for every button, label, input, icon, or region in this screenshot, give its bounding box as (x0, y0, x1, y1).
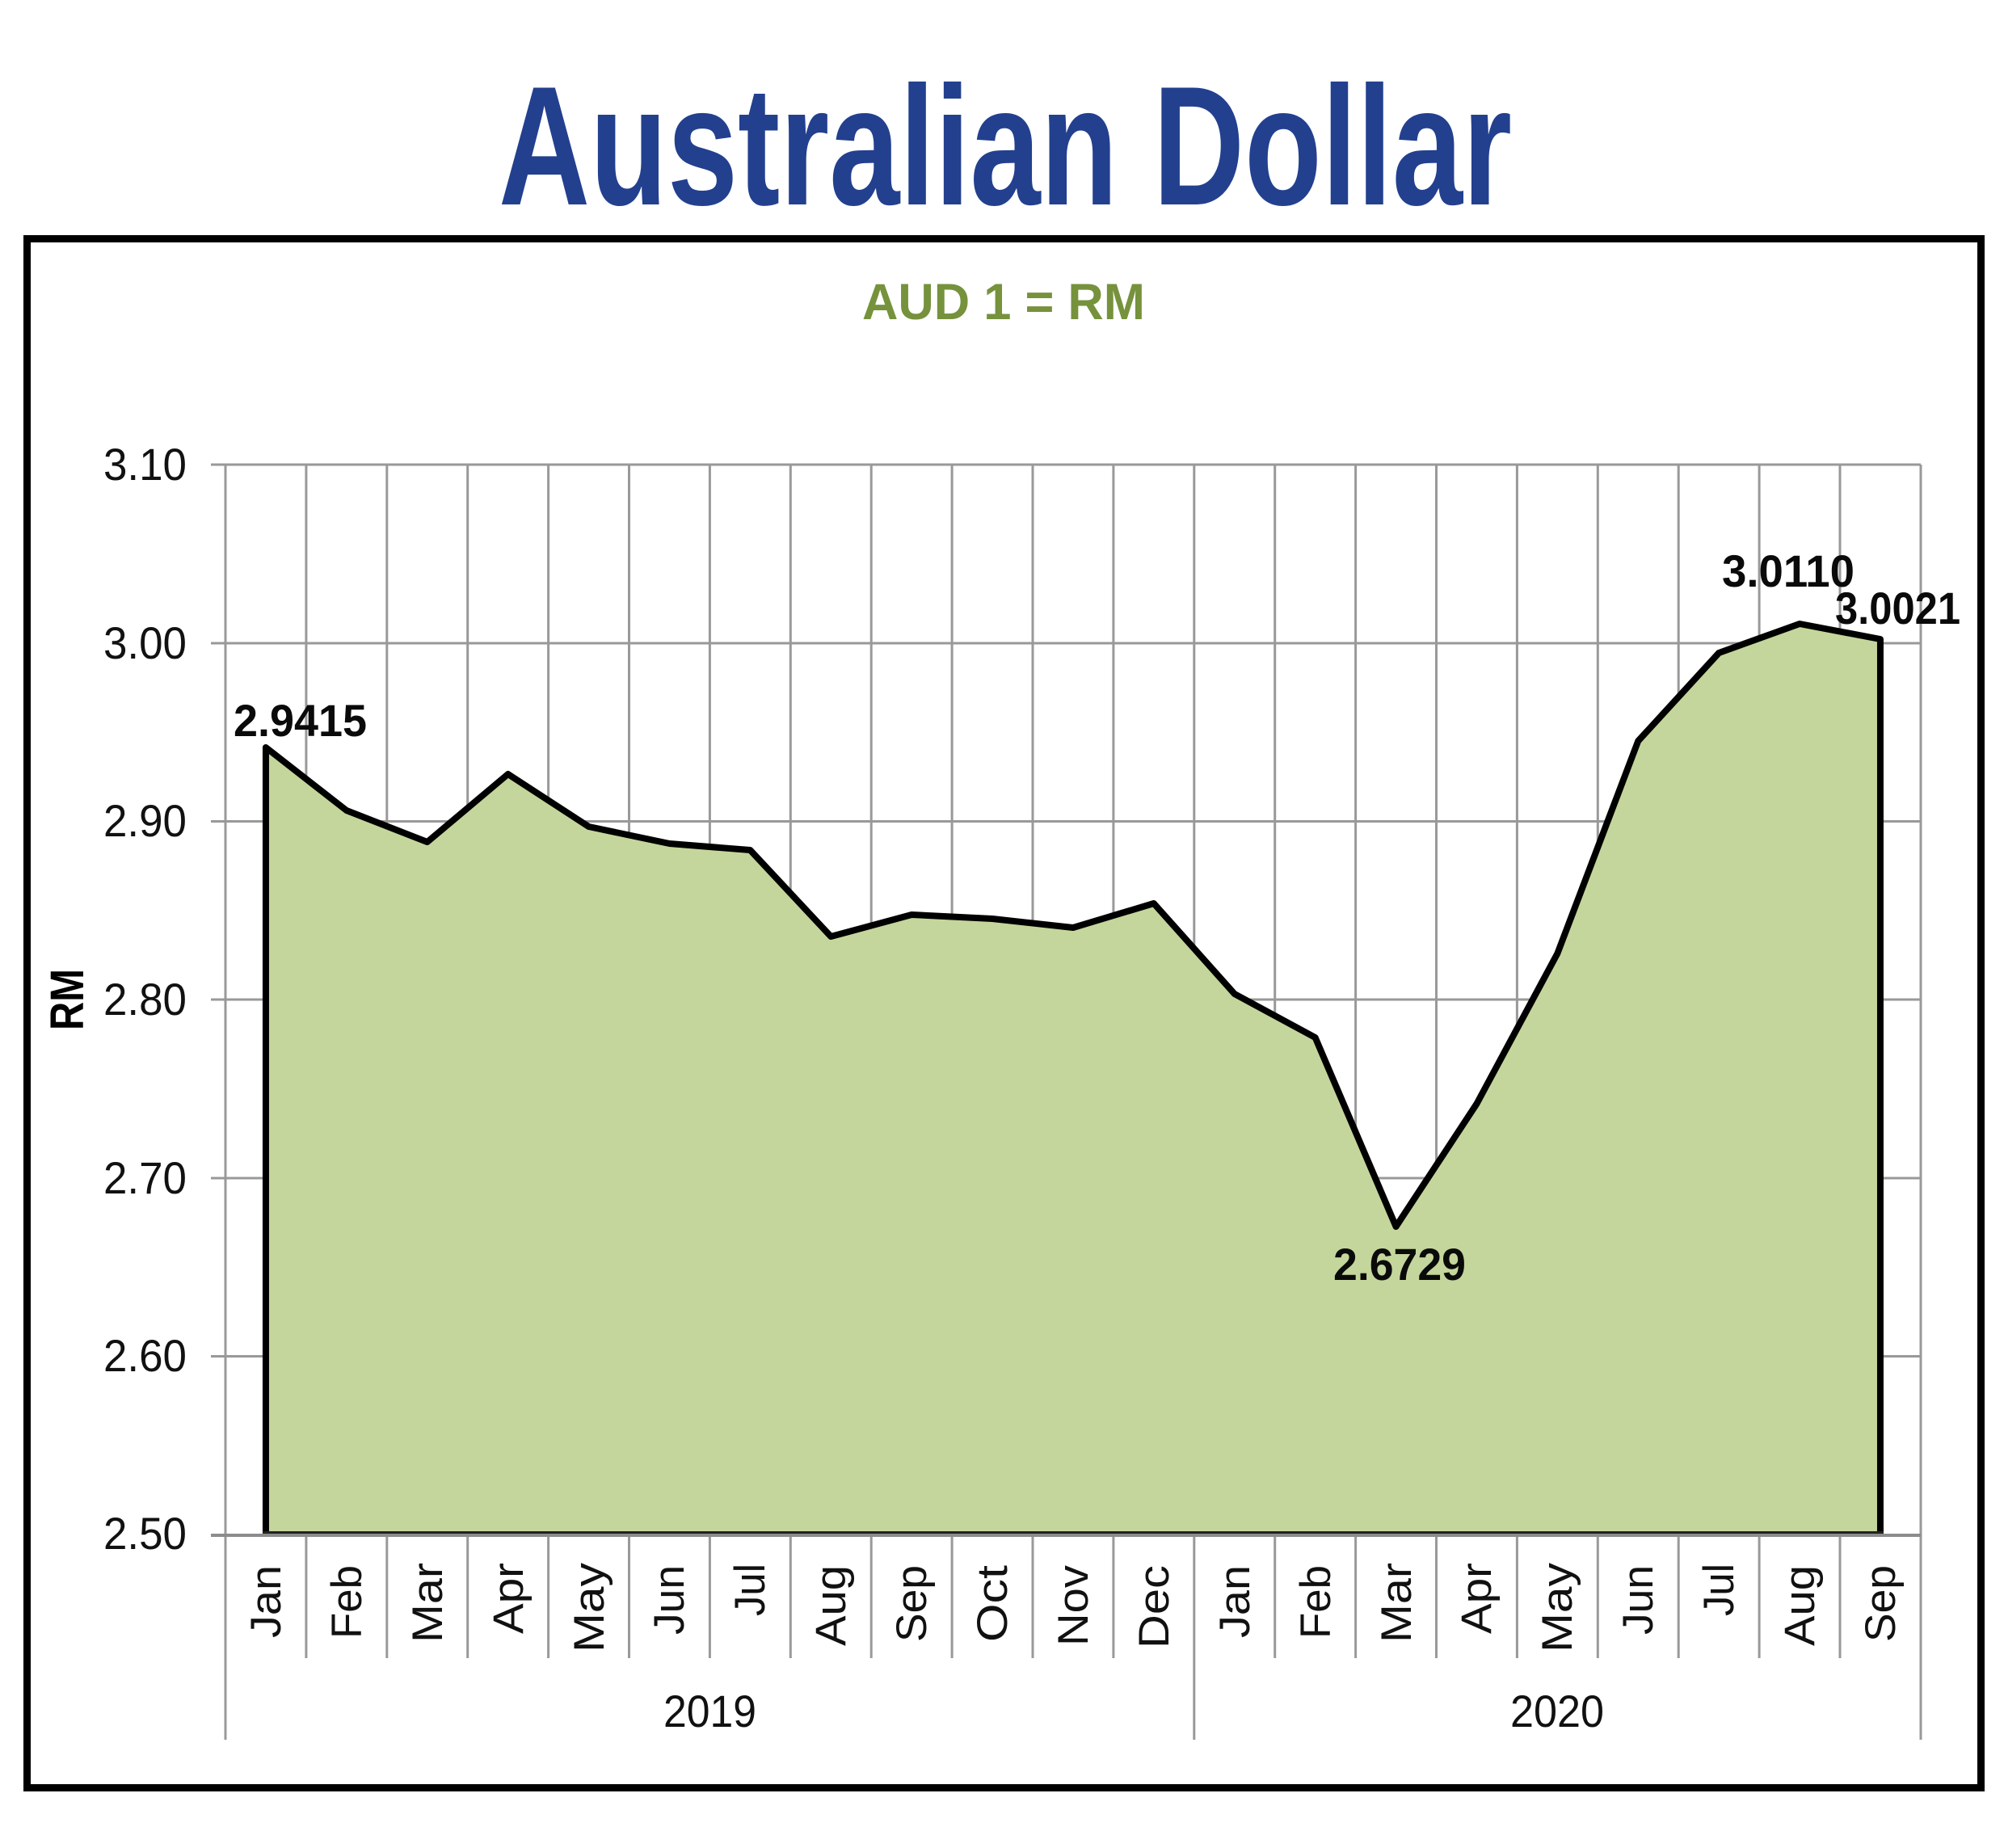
x axis month labels: Feb (323, 1565, 371, 1639)
x axis year label 2019: 2019 (663, 1686, 756, 1736)
x axis month labels: Sep (888, 1565, 936, 1642)
x axis month labels: Nov (1050, 1564, 1097, 1646)
x axis year label 2020: 2020 (1510, 1686, 1604, 1736)
y axis labels: 2.70 (103, 1152, 187, 1203)
x axis month labels: Mar (1373, 1563, 1421, 1643)
x axis month labels: Apr (1453, 1563, 1501, 1634)
y axis labels (103, 439, 187, 1559)
data label: Mar 2020 low: 2.6729 (1333, 1239, 1466, 1290)
x axis month labels: Jul (1695, 1564, 1743, 1616)
x axis month labels (242, 1562, 1905, 1652)
data label: Sep 2020: 3.0021 (1835, 583, 1960, 634)
y axis labels: 2.50 (103, 1508, 187, 1559)
data label: Jan 2019: 2.9415 (234, 695, 367, 746)
x axis month labels: Oct (969, 1565, 1017, 1642)
x axis month labels: Feb (1292, 1565, 1340, 1639)
x axis month labels: Aug (807, 1565, 855, 1646)
horizontal axis line (211, 1534, 1921, 1537)
x axis month labels: Jan (1211, 1565, 1259, 1638)
area series (266, 624, 1880, 1534)
x axis month labels: May (566, 1562, 613, 1652)
x axis month labels: May (1534, 1562, 1581, 1652)
y axis labels: 3.00 (103, 617, 187, 668)
x axis month labels: Apr (485, 1563, 533, 1634)
y axis labels: 3.10 (103, 439, 187, 490)
y axis title: RM (41, 969, 94, 1030)
y axis labels: 2.60 (103, 1330, 187, 1381)
x axis month labels: Aug (1776, 1565, 1824, 1646)
x axis month labels: Sep (1857, 1565, 1905, 1642)
title: Australian Dollar (499, 51, 1512, 241)
series outline (266, 624, 1880, 1534)
x axis month labels: Mar (404, 1563, 452, 1643)
subtitle: AUD 1 = RM (862, 274, 1145, 330)
chart: AUD to RM area chart (41, 439, 1960, 1740)
x axis month labels: Jun (1615, 1565, 1662, 1635)
x axis month labels: Jan (242, 1565, 290, 1638)
y axis labels: 2.80 (103, 974, 187, 1025)
x axis month labels: Jun (646, 1565, 693, 1635)
x axis month labels: Dec (1130, 1565, 1178, 1648)
x axis month labels: Jul (726, 1564, 774, 1616)
y axis labels: 2.90 (103, 795, 187, 846)
data label: Aug 2020: 3.0110 (1722, 545, 1855, 596)
